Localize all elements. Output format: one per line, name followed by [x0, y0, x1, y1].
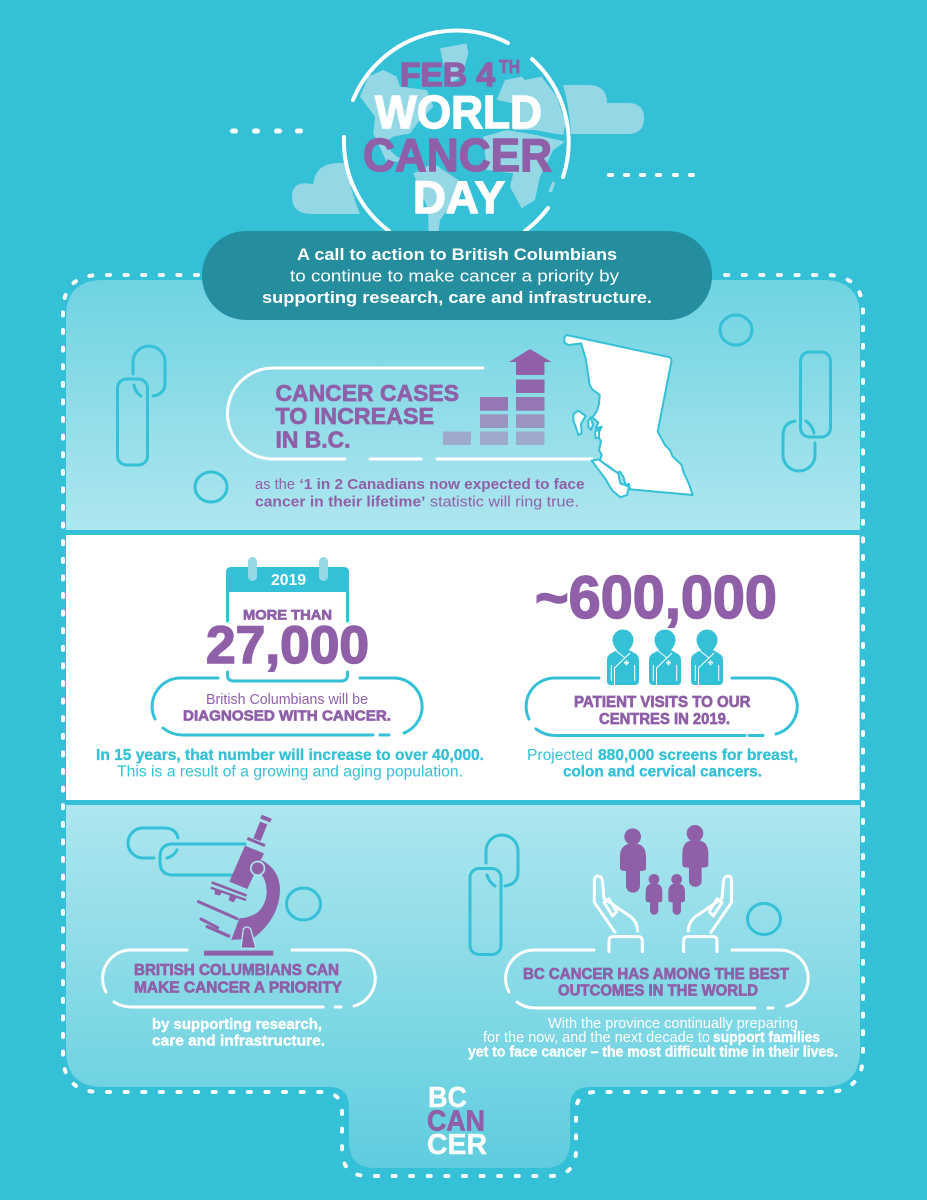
text: province preparing	[468, 1016, 838, 1060]
call to action pill	[202, 231, 712, 320]
text: projected screens	[527, 747, 798, 780]
logo: BC Cancer: BC	[428, 1082, 467, 1114]
text: 15 year projection	[96, 747, 484, 780]
title: TH	[499, 57, 520, 77]
heading: cancer cases to increase: IN B.C.	[276, 426, 350, 452]
dots right of title	[607, 173, 695, 177]
chain icon by family	[470, 835, 518, 954]
icon: family held by hands	[594, 825, 732, 952]
chain icon top right	[783, 352, 830, 471]
logo: BC Cancer: CAN	[427, 1106, 485, 1138]
globe land masses	[360, 43, 566, 233]
text: patient visits	[574, 694, 750, 728]
heading: cancer cases to increase: TO INCREASE	[276, 403, 434, 429]
globe outline arcs	[344, 31, 569, 231]
call to action pill: A call to action to British Columbians	[297, 245, 617, 264]
callout outline: cancer cases	[228, 368, 592, 459]
logo: BC Cancer	[427, 1082, 487, 1161]
logo: BC Cancer: CER	[427, 1129, 487, 1161]
text: 1 in 2 statistic: cancer in their lifetime’	[255, 494, 426, 510]
call to action pill: to continue to make cancer a priority by	[290, 266, 620, 286]
stat: 600,000 visits: ~600,000	[535, 564, 777, 631]
ring by family	[748, 904, 780, 934]
panel: white statistics band	[66, 535, 859, 800]
text: province preparing: support families	[713, 1030, 820, 1046]
icon: 2019 calendar	[226, 557, 349, 681]
title: CANCER	[363, 129, 552, 181]
text: diagnosed with cancer: DIAGNOSED WITH CANCER.	[183, 708, 391, 724]
text: province preparing: With the province continually preparing	[548, 1016, 798, 1032]
text: 1 in 2 statistic: ‘1 in 2 Canadians now expected to face	[300, 476, 584, 493]
band dividers	[66, 530, 860, 805]
call to action pill: supporting research, care and infrastructure.	[262, 288, 652, 307]
dots left of title	[230, 128, 303, 134]
text: by supporting research	[152, 1017, 325, 1050]
text: make cancer a priority: BRITISH COLUMBIANS CAN	[134, 962, 339, 979]
text: by supporting research: by supporting research,	[152, 1017, 322, 1033]
text: best outcomes: OUTCOMES IN THE WORLD	[558, 982, 758, 1000]
text: projected screens: colon and cervical cancers.	[563, 764, 762, 780]
text: patient visits: PATIENT VISITS TO OUR	[574, 694, 750, 711]
text: 15 year projection: This is a result of a growing and aging population.	[117, 764, 463, 780]
text: 1 in 2 statistic	[255, 476, 584, 510]
title: DAY	[413, 172, 505, 223]
chain icon by microscope	[128, 828, 245, 875]
stat: more than 27,000: 27,000	[206, 616, 369, 675]
text: projected screens: Projected	[527, 747, 593, 764]
text: best outcomes	[523, 966, 790, 1000]
text: patient visits: CENTRES IN 2019.	[599, 711, 730, 728]
icon: microscope	[198, 817, 280, 956]
header cloud right	[563, 85, 644, 134]
dashed panel outline	[63, 275, 863, 1176]
header cloud left	[292, 163, 360, 214]
bar chart: rising cases with arrow	[443, 349, 552, 445]
title: FEB 4	[400, 56, 496, 93]
text: 1 in 2 statistic: statistic will ring true.	[430, 494, 579, 510]
callout outline: patient visits	[526, 678, 797, 736]
text: province preparing: yet to face cancer – the most difficult time in their lives.	[468, 1044, 838, 1060]
text: 1 in 2 statistic: as the	[255, 476, 295, 493]
text: 15 year projection: In 15 years, that number will increase to over 40,000.	[96, 747, 484, 764]
text: projected screens: 880,000 screens for breast,	[598, 747, 798, 764]
text: by supporting research: care and infrastructure.	[152, 1034, 325, 1050]
heading: cancer cases to increase: CANCER CASES	[276, 380, 459, 406]
ring by microscope	[286, 888, 320, 920]
title	[363, 56, 552, 223]
callout outline: diagnosed	[152, 678, 422, 735]
icon: 2019 calendar: 2019	[271, 572, 306, 589]
callout outline: make cancer a priority	[103, 950, 375, 1007]
text: diagnosed with cancer	[183, 691, 391, 724]
chain icon top left	[118, 346, 165, 465]
panel: main background	[66, 280, 860, 1168]
text: make cancer a priority: MAKE CANCER A PRIORITY	[134, 980, 343, 996]
map: British Columbia	[564, 335, 693, 497]
title: WORLD	[375, 86, 542, 138]
icon: three patients	[607, 630, 723, 685]
ring left	[195, 472, 227, 502]
stat: more than 27,000: MORE THAN	[243, 606, 332, 622]
text: diagnosed with cancer: British Columbians will be	[206, 691, 368, 708]
text: make cancer a priority	[134, 962, 343, 996]
text: province preparing: for the now, and the next decade to	[483, 1030, 710, 1046]
text: best outcomes: BC CANCER HAS AMONG THE BEST	[523, 966, 790, 983]
ring top right	[720, 315, 752, 345]
callout outline: best outcomes	[506, 950, 808, 1008]
heading: cancer cases to increase	[276, 380, 459, 452]
